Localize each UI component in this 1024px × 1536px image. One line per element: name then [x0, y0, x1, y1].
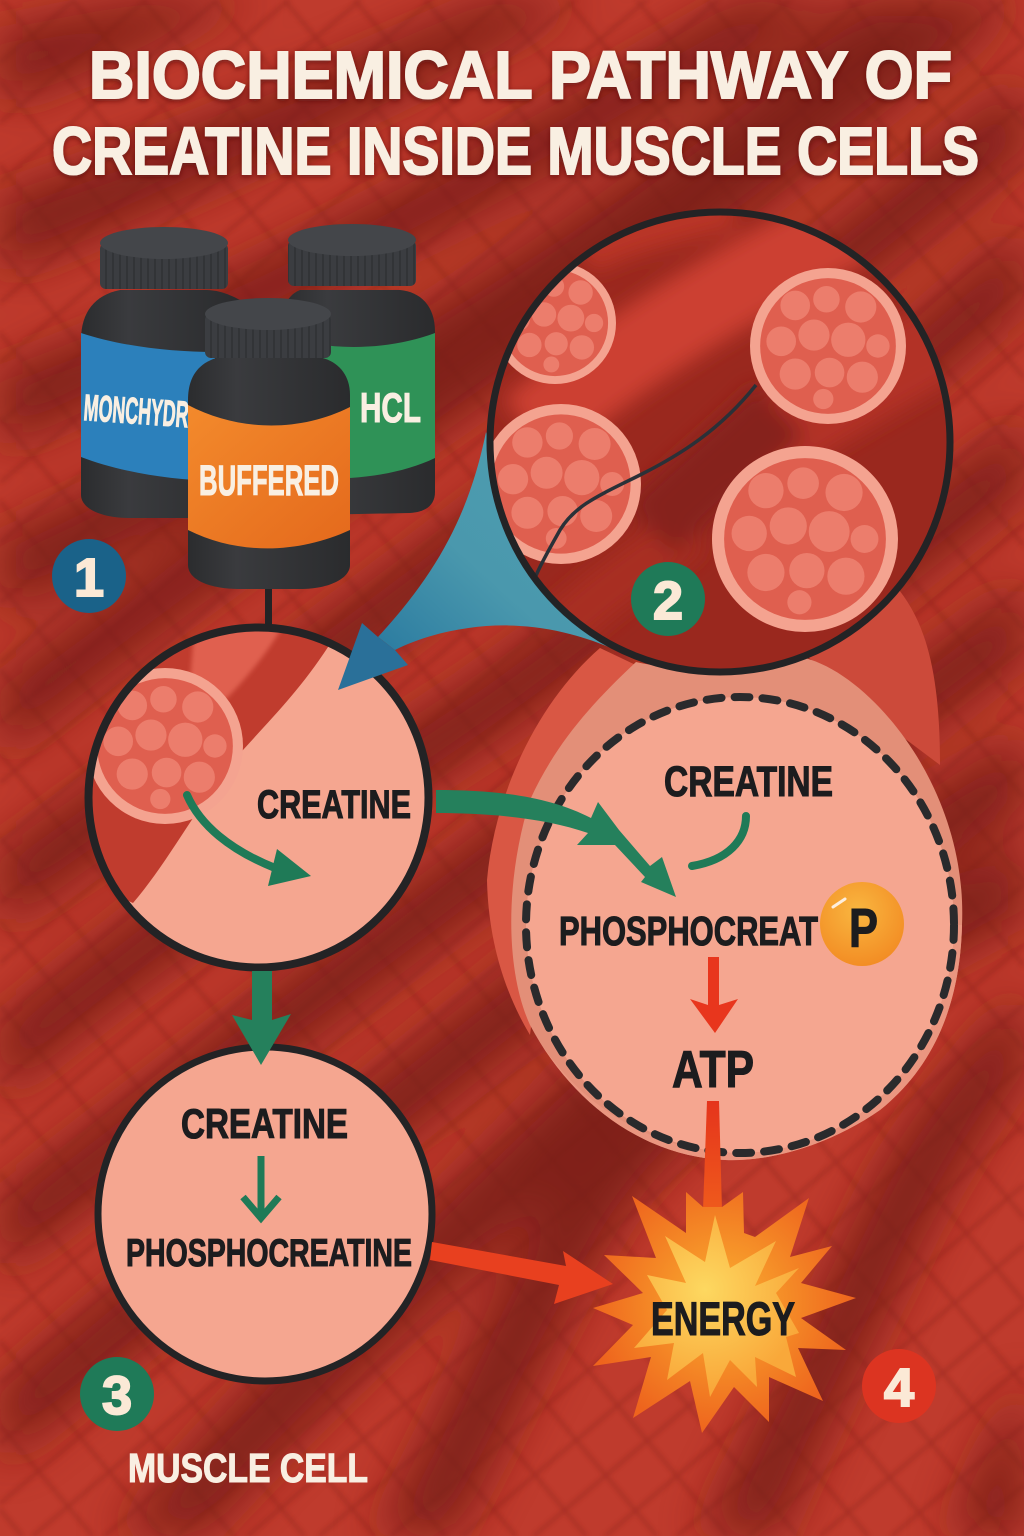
small green arrow	[243, 1156, 279, 1218]
red line from ATP to energy	[703, 1101, 722, 1210]
lens ring	[490, 212, 950, 672]
badge 3	[80, 1357, 154, 1431]
bottle: monohydrate	[81, 227, 240, 518]
connector: bottles to cell	[265, 589, 272, 625]
cross-section	[87, 668, 243, 824]
fiber outside cell	[92, 632, 328, 903]
title: BIOCHEMICAL PATHWAY OF	[89, 38, 952, 113]
badge 1: 1	[74, 548, 104, 608]
zoomed fiber lens	[481, 200, 960, 672]
curved arrow: creatine to phosphocreatine	[692, 816, 746, 866]
red arrow to ATP	[690, 957, 738, 1033]
cross-section: left	[481, 404, 641, 564]
cross-section: lower right	[712, 446, 898, 632]
bottle: buffered	[188, 298, 350, 589]
lens interior	[481, 200, 960, 672]
badge 2	[631, 562, 705, 636]
red arrow to energy	[430, 1242, 613, 1304]
nerve line	[535, 385, 756, 578]
label: phosphocreatine: PHOSPHOCREATINE	[126, 1232, 412, 1275]
badge 4: 4	[884, 1358, 914, 1418]
energy burst	[593, 1192, 856, 1433]
label: creatine: CREATINE	[181, 1100, 348, 1147]
green arrow: down to phosphocreatine circle	[232, 971, 291, 1065]
cell outer membrane layers	[487, 585, 962, 1160]
circle: creatine to phosphocreatine	[98, 1047, 432, 1381]
label: creatine: CREATINE	[664, 758, 833, 806]
badge 3: 3	[102, 1366, 132, 1426]
phosphate ball	[820, 882, 904, 966]
bottle: HCL: HCL	[360, 384, 421, 431]
curved green arrow	[187, 795, 311, 886]
badge 2: 2	[653, 571, 683, 631]
cross-section: top left	[508, 266, 616, 384]
circle: creatine uptake	[80, 620, 428, 968]
title	[52, 38, 979, 189]
teal callout pointer	[338, 432, 620, 690]
label: energy: ENERGY	[651, 1292, 795, 1345]
large muscle cell	[487, 585, 962, 1160]
label: muscle cell: MUSCLE CELL	[128, 1445, 368, 1491]
bottle: buffered: BUFFERED	[199, 457, 339, 505]
label: phosphocreat: PHOSPHOCREAT	[559, 908, 818, 954]
cross-section: top right	[750, 268, 906, 424]
badge 4	[862, 1349, 936, 1423]
badge 1	[52, 539, 126, 613]
phosphate ball: P	[849, 897, 878, 959]
bottle: HCL	[281, 224, 435, 515]
bottle: monohydrate: MONCHYDR	[82, 387, 190, 435]
bottles	[81, 224, 435, 589]
label: ATP: ATP	[672, 1041, 754, 1099]
green arrow: cell to dashed compartment	[436, 790, 676, 897]
label: creatine: CREATINE	[257, 783, 411, 827]
dashed cell membrane	[526, 697, 954, 1153]
